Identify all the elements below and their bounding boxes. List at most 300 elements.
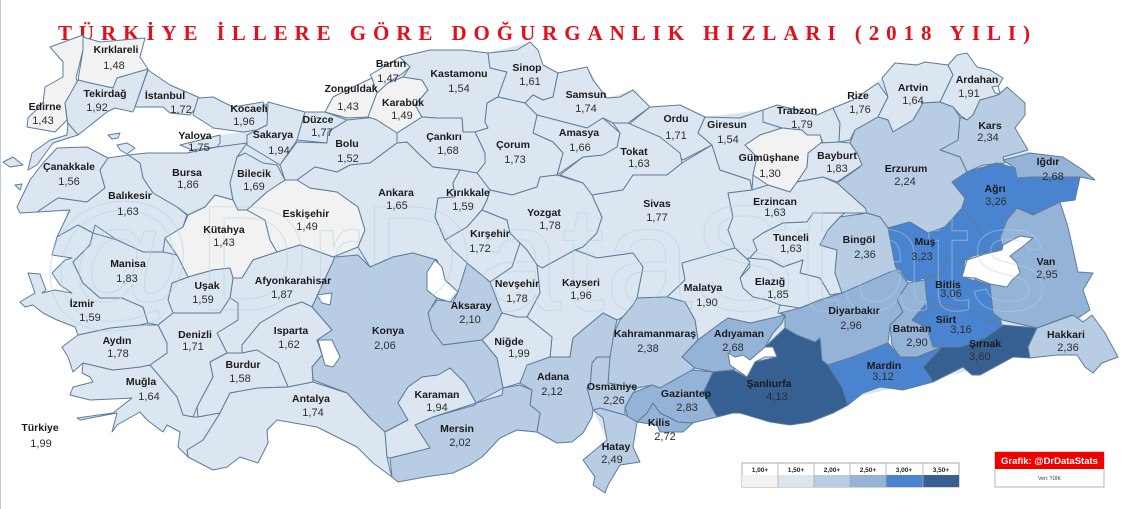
label: Rize: 1,76	[849, 104, 871, 116]
label: Tunceli: 1,63	[780, 243, 802, 255]
label: Bartın	[376, 58, 406, 85]
label: Zonguldak: 1,43	[337, 101, 359, 113]
label: Balıkesir: 1,63	[117, 206, 139, 218]
label: Zonguldak	[324, 83, 378, 113]
label: Kahramanmaraş: 2,38	[637, 343, 659, 355]
label: Çankırı: Çankırı	[426, 131, 462, 143]
watermark: @DrDataStats	[38, 174, 1048, 342]
label: Gümüşhane	[739, 152, 799, 180]
legend swatch 1,00+	[742, 467, 778, 487]
label: Çorum: Çorum	[496, 139, 530, 151]
label: Niğde: 1,99	[508, 348, 530, 360]
label: Gümüşhane: Gümüşhane	[739, 152, 799, 164]
label: Isparta: 1,62	[278, 339, 300, 351]
label: Artvin: Artvin	[898, 82, 928, 94]
province: Çorum	[475, 97, 563, 195]
label: Van	[1036, 256, 1058, 281]
label: Karaman: 1,94	[426, 402, 448, 414]
island: Marmara	[117, 143, 135, 154]
label: Trabzon	[777, 105, 817, 131]
province: Erzincan	[728, 177, 867, 260]
label: Siirt: 3,16	[950, 324, 972, 336]
label: Amasya	[559, 127, 599, 154]
label: Şanlıurfa: Şanlıurfa	[747, 378, 792, 390]
label: Karaman: Karaman	[415, 389, 459, 401]
label: Çorum	[496, 139, 530, 166]
label: Nevşehir: 1,78	[506, 293, 528, 305]
lake: Çıldır	[992, 86, 1000, 94]
label: Gaziantep: Gaziantep	[661, 388, 711, 400]
label: Siirt: Siirt	[936, 314, 957, 326]
label: Erzincan: 1,63	[764, 207, 786, 219]
province: Ordu	[628, 105, 712, 160]
label: Afyonkarahisar	[255, 275, 331, 301]
label: Hakkari: 2,36	[1057, 342, 1079, 354]
label: Nevşehir	[495, 278, 539, 305]
label: Tekirdağ: 1,92	[86, 102, 108, 114]
label: Bolu: Bolu	[335, 138, 359, 150]
label: Kocaeli	[230, 103, 268, 128]
label: İzmir: 1,59	[79, 312, 101, 324]
label: Kars: Kars	[978, 120, 1002, 132]
province: Kırıkkale	[435, 170, 490, 240]
label: Erzurum: 2,24	[894, 176, 916, 188]
label: Sinop: 1,61	[519, 76, 541, 88]
source box: Veri: TÜİK	[1038, 475, 1062, 482]
province: Kırşehir	[445, 210, 520, 282]
label: Ordu	[663, 113, 689, 142]
legend swatch 1,50+	[778, 467, 814, 487]
label: Hatay	[601, 441, 630, 466]
label: Bingöl	[843, 234, 876, 261]
province: Malatya	[667, 248, 785, 340]
label: Mardin	[867, 360, 901, 383]
label: Aydın	[103, 335, 131, 360]
province: Karaman	[385, 368, 476, 458]
label: Kastamonu: 1,54	[448, 83, 470, 95]
label: Kahramanmaraş: Kahramanmaraş	[614, 328, 696, 340]
province: Siirt	[912, 305, 1003, 347]
label: Mersin: 2,02	[449, 437, 471, 449]
label: Karabük: 1,49	[391, 110, 413, 122]
province: Antalya	[187, 382, 392, 477]
label: Ankara: Ankara	[378, 187, 414, 199]
province: Gümüşhane	[745, 128, 822, 192]
province: Isparta	[242, 302, 332, 387]
label: Kocaeli: Kocaeli	[230, 103, 268, 115]
label: Tokat: Tokat	[620, 146, 648, 158]
label: Malatya: Malatya	[684, 282, 722, 294]
province: Van	[975, 202, 1093, 328]
legend swatch 2,00+	[814, 467, 850, 487]
province labels	[21, 44, 1085, 466]
label: Trabzon: 1,79	[791, 119, 813, 131]
label: Düzce: 1,77	[311, 127, 333, 139]
label: Konya	[372, 325, 404, 352]
label: Karabük: Karabük	[382, 97, 424, 109]
province: Kocaeli	[193, 97, 268, 132]
label: Sakarya: 1,94	[268, 145, 290, 157]
province: Bilecik	[230, 153, 285, 210]
label: Şanlıurfa	[747, 378, 792, 403]
label: Iğdır	[1037, 156, 1064, 183]
label: Trabzon: Trabzon	[777, 105, 817, 117]
province: Edirne	[27, 35, 83, 132]
province: Çanakkale peninsula	[28, 123, 78, 170]
label: Diyarbakır: Diyarbakır	[828, 305, 880, 317]
label: Adıyaman: Adıyaman	[714, 328, 764, 340]
label: Edirne	[29, 101, 61, 127]
label: Sakarya	[253, 129, 293, 157]
label: Çankırı	[426, 131, 462, 157]
label: Giresun: Giresun	[707, 119, 747, 131]
label: Hakkari	[1047, 329, 1085, 354]
label: Karaman	[415, 389, 459, 414]
province: Düzce	[297, 112, 347, 143]
source box: Grafik: @DrDataStats	[1001, 456, 1098, 467]
label: Gümüşhane: 1,30	[759, 168, 781, 180]
label: Çorum: 1,73	[504, 154, 526, 166]
label: Düzce	[303, 114, 334, 139]
label: Yozgat: Yozgat	[527, 207, 561, 219]
province: Mardin	[828, 343, 942, 405]
label: Adana	[537, 371, 569, 398]
label: Şanlıurfa: 4,13	[766, 391, 788, 403]
label: Siirt	[936, 314, 972, 336]
label: Bursa	[172, 167, 202, 191]
label: Adana: 2,12	[541, 386, 563, 398]
label: Antalya: 1,74	[302, 407, 324, 419]
label: Kırşehir: Kırşehir	[470, 228, 510, 240]
label: Konya: Konya	[372, 325, 404, 337]
label: Osmaniye	[587, 381, 637, 407]
province: Bitlis	[925, 257, 993, 323]
legend swatch 1,50+: 1,50+	[788, 467, 804, 474]
label: Manisa: Manisa	[110, 258, 146, 270]
legend swatch 3,00+: 3,00+	[896, 467, 912, 474]
province: Ankara	[297, 142, 467, 292]
province: Çanakkale	[17, 147, 108, 213]
province: Hatay	[583, 408, 640, 493]
label: Bursa: Bursa	[172, 167, 202, 179]
label: Eskişehir: Eskişehir	[283, 208, 329, 220]
label: Bingöl: Bingöl	[843, 234, 875, 246]
province: Muş	[888, 208, 983, 282]
label: Niğde	[494, 336, 530, 360]
label: Sivas: 1,77	[646, 212, 668, 224]
province: Adıyaman	[682, 315, 785, 372]
label: Kütahya: Kütahya	[203, 224, 245, 236]
province: Zonguldak	[325, 78, 377, 118]
label: Kütahya	[203, 224, 245, 249]
province: Trabzon	[763, 105, 840, 143]
label: Kars	[977, 120, 1002, 144]
label: İstanbul	[145, 89, 192, 116]
label: Kırıkkale: 1,59	[452, 201, 474, 213]
label: Bayburt	[817, 150, 857, 175]
label: Bolu	[335, 138, 359, 165]
label: Ankara: 1,65	[386, 200, 408, 212]
label: Kayseri: 1,96	[570, 290, 592, 302]
label: Denizli: Denizli	[178, 329, 212, 341]
label: Giresun: 1,54	[717, 134, 739, 146]
label: Türkiye average	[21, 422, 59, 450]
label: Artvin	[898, 82, 928, 107]
label: Sivas	[643, 198, 671, 224]
province: Aksaray	[428, 263, 502, 345]
province: Tekirdağ	[65, 69, 148, 135]
label: Samsun: Samsun	[566, 89, 606, 101]
label: Samsun: 1,74	[575, 103, 597, 115]
province: Balıkesir	[37, 155, 187, 252]
label: Iğdır: 2,68	[1042, 171, 1064, 183]
label: Bayburt: Bayburt	[817, 150, 857, 162]
label: Yalova: 1,75	[188, 142, 210, 154]
label: Edirne: 1,43	[32, 115, 54, 127]
label: Kayseri: Kayseri	[562, 277, 600, 289]
province: Mersin	[390, 385, 540, 482]
province: Ağrı	[952, 163, 1080, 256]
island: Gökçeada	[3, 157, 23, 167]
province: Kastamonu	[400, 50, 507, 132]
province: Giresun	[698, 110, 782, 190]
label: Kırklareli: 1,48	[103, 60, 125, 72]
label: Manisa	[110, 258, 146, 285]
label: Rize	[847, 90, 871, 116]
reservoir: Atatürk Barajı	[728, 347, 777, 377]
label: Afyonkarahisar: Afyonkarahisar	[255, 275, 331, 287]
province: Konya	[312, 253, 503, 432]
label: Kastamonu: Kastamonu	[430, 68, 488, 80]
label: Türkiye average: Türkiye	[21, 422, 59, 434]
label: Kars: 2,34	[977, 132, 999, 144]
legend	[742, 463, 959, 487]
label: Yalova: Yalova	[178, 130, 212, 142]
label: Kilis	[648, 417, 676, 443]
label: Bayburt: 1,83	[826, 163, 848, 175]
label: Yozgat: 1,78	[539, 220, 561, 232]
province: Niğde	[482, 313, 552, 388]
label: Kayseri	[562, 277, 600, 302]
province: Karabük	[368, 77, 428, 133]
label: Bitlis	[935, 279, 962, 300]
label: Ağrı	[984, 183, 1007, 208]
legend swatch 1,00+: 1,00+	[752, 467, 768, 474]
label: Uşak	[192, 280, 220, 306]
legend swatch 2,00+: 2,00+	[824, 467, 840, 474]
province: Muğla	[70, 363, 220, 457]
label: Tunceli: Tunceli	[773, 232, 809, 244]
label: Antalya	[292, 393, 330, 419]
label: Kilis: Kilis	[648, 417, 670, 429]
label: Ordu: Ordu	[663, 113, 689, 125]
province: Sakarya	[247, 102, 305, 165]
province: Samsun	[525, 67, 650, 128]
label: Diyarbakır: 2,96	[840, 320, 862, 332]
label: Isparta: Isparta	[274, 325, 308, 337]
label: Burdur: Burdur	[226, 359, 260, 371]
label: Kırşehir	[469, 228, 510, 255]
label: Aksaray: Aksaray	[451, 300, 492, 312]
province: Eskişehir	[247, 180, 365, 257]
label: Adana: Adana	[537, 371, 569, 383]
province: Burdur	[197, 350, 288, 417]
legend swatch 3,50+	[923, 467, 959, 487]
label: Iğdır: Iğdır	[1037, 156, 1059, 168]
province: Uşak	[168, 268, 233, 313]
province: Bolu	[280, 117, 397, 180]
label: Elazığ	[755, 276, 789, 301]
label: Zonguldak: Zonguldak	[324, 83, 378, 95]
label: Çanakkale: 1,56	[58, 176, 80, 188]
label: Muş: Muş	[914, 236, 936, 248]
province: Nevşehir	[490, 243, 540, 317]
label: Tokat: 1,63	[628, 158, 650, 170]
source box	[995, 452, 1104, 487]
label: Sinop: Sinop	[512, 62, 542, 74]
label: Amasya: Amasya	[559, 127, 599, 139]
label: Elazığ: Elazığ	[755, 276, 785, 288]
label: Çanakkale: Çanakkale	[43, 161, 95, 173]
label: Balıkesir	[108, 190, 152, 218]
label: Kırıkkale: Kırıkkale	[446, 187, 490, 199]
label: Hakkari: Hakkari	[1047, 329, 1085, 341]
label: Muğla	[126, 376, 160, 403]
label: Şırnak: 3,60	[969, 351, 991, 363]
label: Antalya: Antalya	[292, 393, 330, 405]
label: Uşak: Uşak	[194, 280, 220, 292]
label: İstanbul: 1,72	[170, 104, 192, 116]
province: Çankırı	[397, 117, 485, 173]
label: Mardin: Mardin	[867, 360, 901, 372]
label: Ardahan	[956, 74, 998, 100]
province: Denizli	[150, 298, 238, 417]
label: Kütahya: 1,43	[213, 237, 235, 249]
label: Yozgat	[527, 207, 561, 232]
province: Tokat	[560, 123, 682, 195]
label: Osmaniye: 2,26	[603, 395, 625, 407]
label: Erzincan	[753, 196, 797, 219]
label: Kırıkkale	[446, 187, 490, 213]
label: Aydın: Aydın	[103, 335, 131, 347]
province: İzmir	[20, 225, 148, 335]
label: Kahramanmaraş	[614, 328, 696, 355]
province: Yozgat	[482, 175, 602, 268]
label: Burdur	[226, 359, 260, 385]
label: Aksaray	[451, 300, 492, 326]
label: Rize: Rize	[847, 90, 869, 102]
label: Burdur: 1,58	[229, 373, 251, 385]
label: Van: 2,95	[1036, 269, 1058, 281]
label: Tokat	[620, 146, 650, 170]
label: Aydın: 1,78	[107, 348, 129, 360]
label: Ordu: 1,71	[665, 130, 687, 142]
province: Ardahan	[940, 53, 1003, 120]
label: Bursa: 1,86	[177, 179, 199, 191]
label: Karabük	[382, 97, 424, 122]
province: Kırklareli	[78, 37, 148, 88]
label: Muğla: Muğla	[126, 376, 156, 388]
province: Aydın	[62, 325, 167, 372]
label: Uşak: 1,59	[192, 294, 214, 306]
label: Erzincan: Erzincan	[753, 196, 797, 208]
province: Hakkari	[1028, 315, 1118, 373]
label: Batman	[893, 323, 931, 349]
label: Niğde: Niğde	[494, 336, 524, 348]
label: Mersin	[440, 423, 474, 449]
label: İzmir: İzmir	[70, 297, 94, 310]
province: Kütahya	[165, 195, 277, 278]
province: Bursa	[128, 143, 247, 215]
label: Muğla: 1,64	[138, 391, 160, 403]
label: Yalova	[178, 130, 212, 154]
label: Nevşehir: Nevşehir	[495, 278, 539, 290]
label: Kilis: 2,72	[654, 431, 676, 443]
label: Ankara	[378, 187, 414, 212]
province: İstanbul	[135, 70, 198, 115]
province: Bingöl	[820, 213, 897, 293]
label: Muş	[911, 236, 936, 263]
label: Van: Van	[1037, 256, 1055, 268]
label: Şırnak: Şırnak	[969, 338, 1001, 350]
label: Bingöl: 2,36	[854, 249, 876, 261]
label: Hatay: Hatay	[602, 441, 630, 453]
label: Bitlis: 3,06	[940, 288, 962, 300]
label: Balıkesir: Balıkesir	[108, 190, 152, 202]
province: Kars	[940, 87, 1028, 172]
label: Artvin: 1,64	[902, 95, 924, 107]
label: Denizli	[178, 329, 212, 353]
label: Mardin: 3,12	[872, 371, 894, 383]
province: Amasya	[533, 115, 620, 175]
province: Iğdır	[1003, 153, 1095, 180]
label: Sivas: Sivas	[643, 198, 671, 210]
label: Kırşehir: 1,72	[469, 243, 491, 255]
label: Kırklareli	[94, 44, 139, 72]
legend swatch 2,50+: 2,50+	[860, 467, 876, 474]
island: Avşa	[108, 133, 120, 139]
province: Yalova	[180, 135, 220, 150]
label: Batman: 2,90	[906, 337, 928, 349]
label: Adıyaman	[714, 328, 764, 354]
label: Tekirdağ: Tekirdağ	[84, 88, 126, 100]
province: Osmaniye	[587, 357, 637, 415]
province: Erzurum	[837, 102, 967, 233]
label: Ardahan: 1,91	[958, 88, 980, 100]
label: Amasya: 1,66	[569, 142, 591, 154]
label: Düzce: Düzce	[303, 114, 334, 126]
label: Tunceli	[773, 232, 809, 255]
province: Afyonkarahisar	[217, 245, 335, 353]
label: Malatya	[684, 282, 722, 309]
label: Elazığ: 1,85	[767, 289, 789, 301]
title: TÜRKİYE İLLERE GÖRE DOĞURGANLIK HIZLARI (2018 YILI)	[58, 21, 1030, 45]
label: Diyarbakır	[828, 305, 880, 332]
label: Erzurum: Erzurum	[885, 163, 927, 175]
label: Sakarya: Sakarya	[253, 129, 293, 141]
province: Tunceli	[748, 213, 845, 295]
label: Bolu: 1,52	[337, 153, 359, 165]
label: Türkiye average: 1,99	[30, 438, 52, 450]
province: Elazığ	[740, 258, 842, 308]
label: Kırklareli: Kırklareli	[94, 44, 139, 56]
legend swatch 3,50+: 3,50+	[933, 467, 949, 474]
label: Samsun	[566, 89, 606, 115]
province: Artvin	[878, 62, 953, 132]
label: Bilecik: Bilecik	[237, 168, 271, 180]
land underlay	[50, 42, 1100, 470]
label: Mersin: Mersin	[440, 423, 474, 435]
